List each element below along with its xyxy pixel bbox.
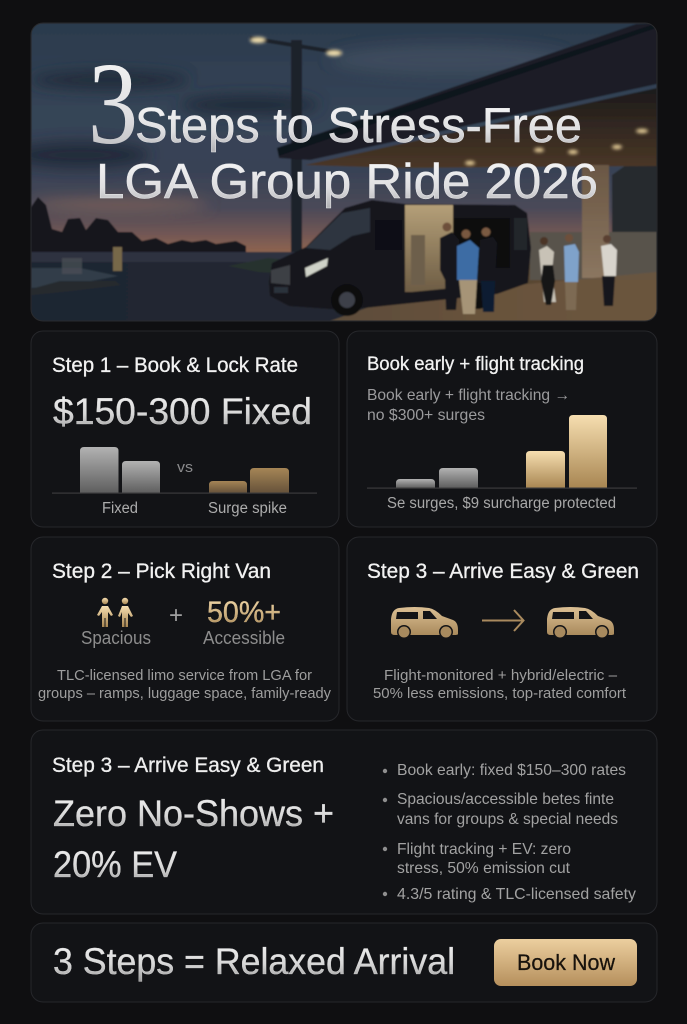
caption: Se surges, $9 surcharge protected <box>387 495 616 512</box>
hero photo: van at dusk <box>10 23 657 322</box>
column <box>582 165 609 278</box>
button: book now: Book Now <box>517 950 615 975</box>
headline line 2: 20% EV <box>53 844 177 885</box>
bar chart: surge comparison <box>367 415 637 489</box>
lamp lights <box>250 37 342 56</box>
big numeral 3: 3 <box>88 38 138 169</box>
panel: step 2 pick right van <box>31 537 339 721</box>
van wheel <box>331 284 363 316</box>
heading: Step 3 – Arrive Easy & Green <box>52 754 324 777</box>
button: book now <box>494 939 637 986</box>
description <box>38 667 331 702</box>
bullet list: stress, 50% emission cut <box>397 860 571 877</box>
label: spacious: Spacious <box>81 628 151 648</box>
heading: Step 2 – Pick Right Van <box>52 560 271 583</box>
big price: $150-300 Fixed <box>53 391 312 432</box>
panel: call to action <box>31 923 657 1002</box>
hero border <box>31 23 657 321</box>
panel: step 3 arrive easy and green <box>347 537 657 721</box>
heading: Step 3 – Arrive Easy & Green <box>367 559 639 583</box>
bar chart: fixed vs surge <box>52 447 317 517</box>
ground <box>31 262 657 322</box>
bullet list: 4.3/5 rating & TLC-licensed safety <box>397 886 636 903</box>
description <box>367 387 570 424</box>
description: Book early + flight tracking → <box>367 387 570 404</box>
icon: van left <box>391 607 458 639</box>
hero panel <box>10 23 657 322</box>
panel: summary <box>31 730 657 914</box>
bar chart: fixed vs surge: Fixed <box>102 500 138 517</box>
van door opening <box>405 205 453 292</box>
heading: Step 1 – Book & Lock Rate <box>52 354 298 377</box>
heading: Book early + flight tracking <box>367 353 584 375</box>
label: accessible: Accessible <box>203 628 285 648</box>
canopy roof <box>277 23 657 160</box>
title line 2: LGA Group Ride 2026 <box>96 155 598 209</box>
headline line 1: Zero No-Shows + <box>53 793 334 834</box>
people <box>440 222 617 314</box>
plus sign: + <box>169 602 183 629</box>
description: 50% less emissions, top-rated comfort <box>373 685 627 702</box>
title line 1: Steps to Stress-Free <box>135 99 582 153</box>
tree line <box>32 197 247 253</box>
bar chart: fixed vs surge: Surge spike <box>208 500 287 517</box>
van front details <box>271 265 290 285</box>
description <box>373 667 627 702</box>
bullet list: Flight tracking + EV: zero <box>397 841 571 858</box>
distant wall <box>530 232 657 280</box>
bar chart: fixed vs surge: vs <box>177 459 193 476</box>
description: no $300+ surges <box>367 407 485 424</box>
warm ground glow <box>330 272 657 321</box>
right tree <box>612 165 656 233</box>
panel: book early and flight tracking <box>347 331 657 527</box>
arrow <box>482 610 524 631</box>
description: TLC-licensed limo service from LGA for <box>57 667 312 684</box>
icon: van right <box>547 607 614 639</box>
panel: step 1 book and lock rate <box>31 331 339 527</box>
description: groups – ramps, luggage space, family-ready <box>38 685 331 702</box>
call to action headline: 3 Steps = Relaxed Arrival <box>53 941 455 982</box>
lamp pole <box>291 40 302 252</box>
stat: 50%+: 50%+ <box>207 596 281 629</box>
canopy underside <box>305 88 657 168</box>
bullet list: Book early: fixed $150–300 rates <box>397 762 626 779</box>
ceiling lights <box>465 129 648 165</box>
van body <box>269 200 531 310</box>
description: Flight-monitored + hybrid/electric – <box>384 667 618 684</box>
bullet list: vans for groups & special needs <box>397 811 618 828</box>
bullet list: Spacious/accessible betes finte <box>397 791 614 808</box>
clouds <box>10 45 570 211</box>
icon: two people <box>97 598 133 627</box>
bullet list <box>383 762 636 903</box>
